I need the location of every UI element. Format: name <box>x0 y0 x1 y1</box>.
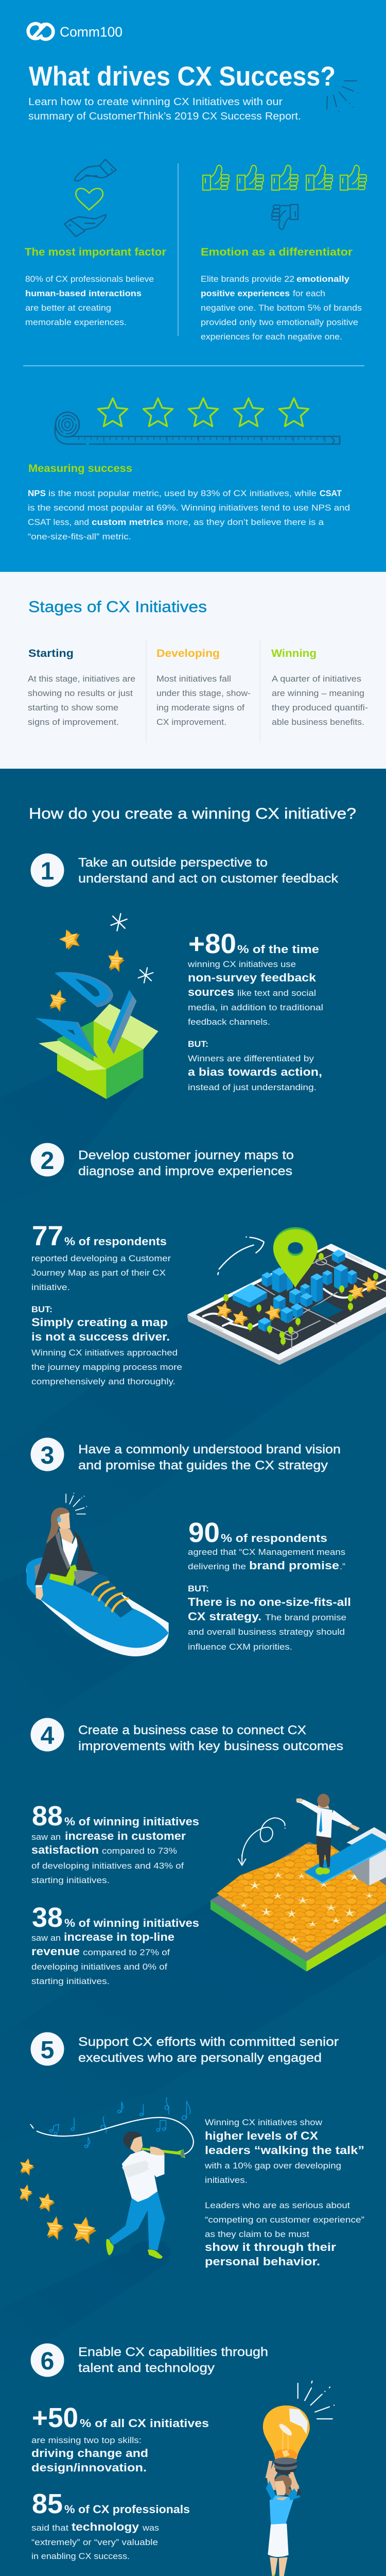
step 1 heading: Take an outside perspective to <box>78 856 268 870</box>
divider <box>23 365 364 366</box>
text block: step 5: Winning CX initiatives show <box>205 2117 323 2127</box>
intro text: summary of CustomerThink’s 2019 CX Success Report. <box>28 111 301 122</box>
text block: measuring success: NPS <box>28 488 46 498</box>
text block: step 5: initiatives. <box>205 2175 248 2185</box>
column: winning: Winning <box>271 648 317 659</box>
text block: step 5: personal behavior. <box>205 2255 320 2268</box>
step 3 heading: Have a commonly understood brand vision <box>78 1443 341 1456</box>
panel: hero background <box>0 0 386 572</box>
illustration: businessman above pile of coins <box>210 1818 386 1972</box>
column: developing: Developing <box>156 648 220 659</box>
text block: step 4 stats: % of winning initiatives <box>64 1815 199 1828</box>
illustration: tablet city map with location pin <box>187 1227 386 1365</box>
text block: step 1 stats: +80 <box>188 928 236 959</box>
text block: step 1 stats <box>187 928 323 1092</box>
column: starting: showing no results or just <box>28 688 133 698</box>
text block: step 1 stats: winning CX initiatives use <box>187 959 296 969</box>
text block: measuring success: CSAT <box>320 488 342 498</box>
text block: step 6 stats: was <box>142 2523 159 2533</box>
text block: step 1 stats: % of the time <box>237 943 319 956</box>
logo: Comm100 white <box>28 24 122 40</box>
logo: Comm100 white: Comm100 <box>60 24 122 40</box>
step 4 heading: improvements with key business outcomes <box>78 1739 343 1753</box>
text block: emotion as a differentiator: Emotion as a differentiator <box>201 246 353 258</box>
text block: step 6 stats: in enabling CX success. <box>31 2551 130 2561</box>
text block: step 3 stats: agreed that “CX Management means <box>188 1547 345 1557</box>
icon: hands holding heart <box>64 159 116 236</box>
text block: step 2 stats: Winning CX initiatives approached <box>31 1348 178 1358</box>
step 5 heading: 5 <box>41 2037 54 2064</box>
text block: step 1 stats: Winners are differentiated by <box>188 1054 314 1063</box>
text block: step 5: leaders “walking the talk” <box>205 2144 364 2157</box>
icon: five thumbs up <box>203 165 366 190</box>
text block: step 1 stats: like text and social <box>237 988 316 998</box>
column: starting: starting to show some <box>28 703 118 713</box>
text block: step 4 stats: increase in customer <box>65 1829 186 1842</box>
panel: stages background <box>0 572 386 769</box>
step 6 heading: talent and technology <box>78 2361 215 2375</box>
text block: step 2 stats: Journey Map as part of their CX <box>31 1268 166 1278</box>
step 2 heading: Develop customer journey maps to <box>78 1148 294 1162</box>
text block: measuring success: more, as they don’t believe there is a <box>166 517 324 527</box>
intro text <box>28 96 301 122</box>
text block: step 2 stats: % of respondents <box>64 1235 167 1248</box>
text block: step 4 stats: starting initiatives. <box>31 1875 110 1885</box>
column: developing <box>156 648 251 727</box>
text block: step 2 stats <box>31 1221 182 1386</box>
text block: step 2 stats: Simply creating a map <box>31 1316 168 1329</box>
text block: emotion as a differentiator: emotionally <box>296 274 350 284</box>
intro text: Learn how to create winning CX Initiatives with our <box>28 96 283 108</box>
step 3 heading: 3 <box>41 1442 54 1469</box>
text block: step 3 stats: .” <box>340 1562 345 1571</box>
panel: how-to background <box>0 769 386 2576</box>
text block: step 2 stats: BUT: <box>31 1304 52 1314</box>
text block: step 6 stats: % of CX professionals <box>64 2503 190 2516</box>
text block: step 4 stats: revenue <box>31 1945 80 1958</box>
text block: step 5: with a 10% gap over developing <box>204 2161 341 2171</box>
text block: step 2 stats: is not a success driver. <box>31 1330 170 1343</box>
text block: step 3 stats: delivering the <box>188 1562 246 1571</box>
step 2 heading: 2 <box>41 1147 54 1175</box>
text block: measuring success: “one-size-fits-all” metric. <box>28 532 131 541</box>
title: What drives CX Success? <box>29 61 336 92</box>
illustration: man playing horn with stars and notes <box>17 2098 194 2262</box>
text block: step 2 stats: comprehensively and thoroughly. <box>31 1377 176 1386</box>
icon: measuring tape <box>55 412 340 444</box>
column: starting: signs of improvement. <box>28 717 119 727</box>
icon: title sparks <box>327 81 358 111</box>
text block: step 3 stats <box>188 1517 351 1652</box>
text block: step 3 stats: The brand promise <box>265 1613 346 1622</box>
text block: step 3 stats: 90 <box>188 1517 220 1548</box>
text block: step 6 stats: are missing two top skills: <box>31 2435 142 2445</box>
column: developing: under this stage, show- <box>156 688 251 698</box>
step 5 heading <box>31 2032 339 2066</box>
text block: measuring success: Measuring success <box>28 463 132 474</box>
column: winning: able business benefits. <box>272 717 364 727</box>
icon: five outline stars <box>98 398 309 426</box>
text block: step 1 stats: a bias towards action, <box>188 1065 322 1078</box>
step 2 heading: diagnose and improve experiences <box>78 1164 292 1178</box>
text block: step 4 stats: satisfaction <box>31 1843 99 1856</box>
text block: emotion as a differentiator: experiences for each negative one. <box>201 332 342 342</box>
text block: the most important factor <box>25 246 166 327</box>
step 6 heading: 6 <box>41 2348 54 2375</box>
text block: step 6 stats: % of all CX initiatives <box>80 2417 209 2430</box>
text block: step 1 stats: sources <box>188 986 234 998</box>
icon: thumb down <box>272 205 298 229</box>
text block: step 1 stats: feedback channels. <box>188 1017 270 1027</box>
illustration: woman legs and shoes <box>265 2557 288 2576</box>
step 1 heading: 1 <box>41 858 54 885</box>
text block: step 1 stats: non-survey feedback <box>188 971 317 984</box>
text block: step 1 stats: BUT: <box>188 1039 208 1049</box>
illustration: woman sitting on giant shoe <box>26 1493 169 1656</box>
long shadows behind illustrations <box>0 1072 386 2576</box>
column: starting: At this stage, initiatives are <box>28 674 135 684</box>
text block: the most important factor: The most important factor <box>25 246 166 258</box>
step 6 heading <box>31 2343 268 2377</box>
text block: step 4 stats: 38 <box>32 1902 63 1933</box>
text block: step 5: “competing on customer experience” <box>205 2215 364 2225</box>
text block: step 4 stats: starting initiatives. <box>31 1976 110 1986</box>
column: winning <box>271 648 368 727</box>
text block: step 4 stats: saw an <box>31 1832 61 1842</box>
text block: step 5: show it through their <box>205 2241 336 2253</box>
step 3 heading: and promise that guides the CX strategy <box>78 1459 328 1472</box>
step 2 heading <box>31 1143 294 1178</box>
heading: how do you create: How do you create a winning CX initiative? <box>29 805 356 822</box>
column: starting <box>28 648 135 727</box>
text block: step 5: Leaders who are as serious about <box>205 2200 350 2210</box>
illustration: open box with rulers and stars <box>36 912 159 1099</box>
text block: step 1 stats: media, in addition to traditional <box>188 1003 323 1012</box>
text block: step 4 stats: increase in top-line <box>64 1930 174 1943</box>
text block: step 2 stats: reported developing a Customer <box>31 1253 171 1263</box>
text block: measuring success <box>28 463 350 541</box>
text block: step 4 stats: of developing initiatives and 43% of <box>31 1861 184 1871</box>
heading: stages of CX initiatives: Stages of CX Initiatives <box>28 598 207 616</box>
text block: step 3 stats: CX strategy. <box>188 1610 261 1623</box>
text block: step 3 stats: brand promise <box>249 1559 339 1572</box>
text block: step 6 stats: driving change and <box>31 2447 148 2460</box>
column: starting: Starting <box>28 648 74 659</box>
text block: emotion as a differentiator: positive experiences <box>201 289 290 298</box>
column: developing: Most initiatives fall <box>156 674 231 684</box>
text block: emotion as a differentiator: negative one. The bottom 5% of brands <box>201 303 362 313</box>
column: winning: are winning – meaning <box>272 688 364 698</box>
step 5 heading: Support CX efforts with committed senior <box>78 2035 339 2049</box>
text block: the most important factor: are better at creating <box>25 303 111 313</box>
text block: step 6 stats: design/innovation. <box>31 2461 147 2474</box>
text block: measuring success: custom metrics <box>92 517 164 527</box>
column: winning: they produced quantifi- <box>272 703 368 713</box>
text block: step 1 stats: instead of just understanding. <box>188 1082 317 1092</box>
text block: step 6 stats: technology <box>72 2520 139 2533</box>
text block: measuring success: CSAT less, and <box>28 517 89 527</box>
step 4 heading: 4 <box>41 1722 55 1750</box>
text block: emotion as a differentiator: provided only two emotionally positive <box>201 317 358 327</box>
text block: step 6 stats: “extremely” or “very” valuable <box>31 2537 158 2547</box>
text block: step 2 stats: 77 <box>32 1221 63 1251</box>
text block: step 3 stats: influence CXM priorities. <box>188 1642 292 1652</box>
text block: step 3 stats: There is no one-size-fits-all <box>188 1596 351 1608</box>
divider <box>178 163 179 336</box>
text block: step 3 stats: BUT: <box>188 1584 209 1594</box>
illustration: woman holding light bulb <box>263 2381 334 2557</box>
text block: step 3 stats: % of respondents <box>221 1532 327 1545</box>
text block: step 6 stats: +50 <box>32 2402 78 2433</box>
text block: step 2 stats: initiative. <box>31 1282 70 1292</box>
text block: step 4 stats: compared to 27% of <box>83 1947 170 1957</box>
text block: step 4 stats: % of winning initiatives <box>64 1917 199 1929</box>
text block: step 4 stats: 88 <box>32 1801 63 1832</box>
text block: step 4 stats: compared to 73% <box>102 1846 177 1856</box>
step 3 heading <box>31 1437 341 1472</box>
text block: step 4 stats: developing initiatives and 0% of <box>31 1962 167 1972</box>
text block: step 3 stats: and overall business strategy should <box>188 1627 345 1637</box>
text block: step 4 stats <box>31 1801 199 1986</box>
text block: measuring success: is the second most popular at 69%. Winning initiatives tend to use NPS and <box>28 503 350 513</box>
text block: step 5: as they claim to be must <box>205 2229 309 2239</box>
step 1 heading <box>31 853 339 887</box>
step 1 heading: understand and act on customer feedback <box>78 872 339 886</box>
text block: step 6 stats <box>31 2402 209 2561</box>
text block: the most important factor: 80% of CX professionals believe <box>25 274 154 284</box>
text block: emotion as a differentiator: for each <box>293 289 325 298</box>
column: winning: A quarter of initiatives <box>272 674 361 684</box>
illustration: businessman figure <box>296 1794 360 1855</box>
text block: step 5: higher levels of CX <box>205 2129 318 2142</box>
text block: emotion as a differentiator: Elite brands provide 22 <box>201 274 294 284</box>
text block: emotion as a differentiator <box>201 246 362 342</box>
step 4 heading <box>31 1718 343 1753</box>
text block: the most important factor: human-based interactions <box>25 289 142 298</box>
text block: measuring success: is the most popular metric, used by 83% of CX initiatives, while <box>48 488 317 498</box>
text block: step 6 stats: 85 <box>32 2488 63 2519</box>
step 4 heading: Create a business case to connect CX <box>78 1723 306 1737</box>
step 5 heading: executives who are personally engaged <box>78 2051 322 2065</box>
step 6 heading: Enable CX capabilities through <box>78 2345 268 2359</box>
text block: step 4 stats: saw an <box>31 1933 61 1943</box>
text block: step 6 stats: said that <box>31 2523 68 2533</box>
column: developing: ing moderate signs of <box>156 703 244 713</box>
text block: the most important factor: memorable experiences. <box>25 317 127 327</box>
text block: step 5 <box>204 2117 364 2268</box>
column: developing: CX improvement. <box>156 717 226 727</box>
text block: step 2 stats: the journey mapping process more <box>31 1362 182 1372</box>
